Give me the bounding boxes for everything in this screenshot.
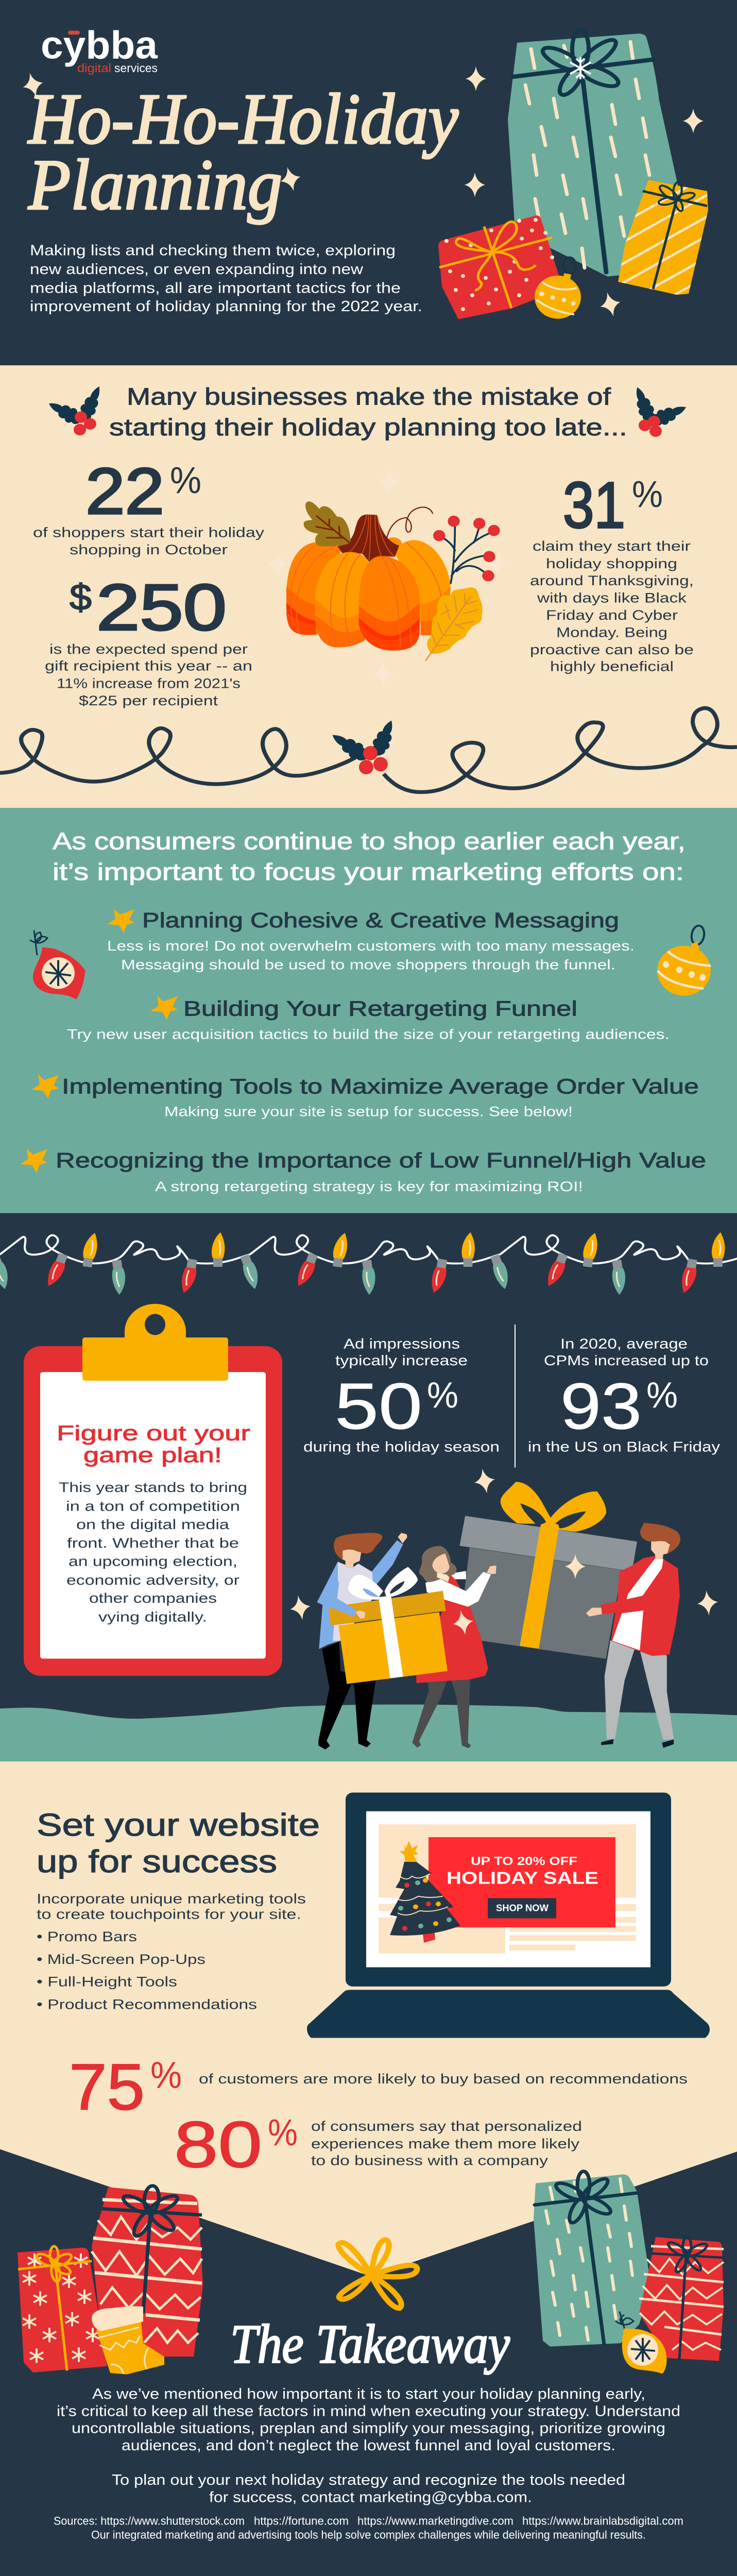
icon: holly right (630, 385, 690, 437)
stat: 22%: of shoppers start their holiday (33, 525, 264, 540)
takeaway paragraph: audiences, and don’t neglect the lowest funnel and loyal customers. (122, 2437, 615, 2454)
panel: clipboard game plan: Figure out your (57, 1422, 250, 1445)
heading: too late: Many businesses make the mistake of (127, 383, 611, 410)
sources footer (54, 2514, 683, 2541)
panel: clipboard game plan: other companies (89, 1590, 217, 1606)
title (27, 79, 459, 225)
logo: cybba digital services: services (114, 62, 158, 75)
heading: shop earlier (53, 828, 685, 886)
ground (0, 1705, 737, 1761)
stat: 31%: 31 (563, 468, 625, 541)
intro text: Making lists and checking them twice, exploring (30, 243, 396, 259)
stat: 93% CPMs: % (646, 1375, 678, 1415)
stat: 31%: holiday shopping (546, 556, 677, 571)
title: Ho-Ho-Holiday (27, 79, 459, 159)
tactic 1: messaging: Less is more! Do not overwhelm customers with too many messages. (107, 938, 635, 954)
intro text: improvement of holiday planning for the 2022 year. (30, 298, 422, 315)
stat: 50% ad impressions: during the holiday season (303, 1439, 500, 1455)
icon: pumpkin with leaves and berries (286, 501, 500, 660)
tactic 3: average order value (31, 1074, 699, 1119)
intro text (30, 243, 422, 315)
takeaway paragraph: To plan out your next holiday strategy and recognize the tools needed (112, 2472, 625, 2488)
icon: red snowflake gift (18, 2246, 107, 2372)
intro text: new audiences, or even expanding into new (30, 261, 363, 278)
sources footer: https://www.brainlabsdigital.com (522, 2514, 683, 2527)
string lights (0, 1232, 737, 1295)
divider (515, 1325, 516, 1467)
faint sparkles around pumpkin (268, 469, 508, 686)
takeaway paragraph: for success, contact marketing@cybba.com. (209, 2489, 532, 2505)
stat: 50% ad impressions: 50 (335, 1369, 422, 1443)
stat: 80%: experiences make them more likely (311, 2136, 579, 2151)
stat: 80%: to do business with a company (311, 2153, 548, 2168)
woman (412, 1546, 496, 1748)
heading: set your website (37, 1807, 320, 1879)
icon: red zigzag tall gift (92, 2185, 203, 2357)
sources footer: Our integrated marketing and advertising tools help solve complex challenges while delivering meaningful results. (91, 2528, 646, 2541)
stat: 22%: % (170, 459, 201, 501)
icon: laptop with holiday sale popup (307, 1792, 710, 2038)
stat: 80%: of consumers say that personalized (311, 2119, 582, 2134)
stat: $250: gift recipient this year -- an (45, 658, 252, 673)
stat: $250: 250 (96, 571, 227, 644)
left person (317, 1533, 407, 1750)
big gray gift (459, 1482, 637, 1659)
sources footer: https://fortune.com (254, 2514, 349, 2527)
takeaway paragraph: uncontrollable situations, preplan and simplify your messaging, prioritize growing (72, 2420, 665, 2436)
illustration sparkles (288, 1467, 719, 1637)
stat: 22%: 22 (85, 454, 164, 528)
icon: holly left (45, 383, 106, 435)
stat: 31%: % (632, 473, 663, 515)
panel: clipboard game plan: front. Whether that be (67, 1535, 239, 1551)
website tools list: to create touchpoints for your site. (37, 1906, 301, 1922)
stat: $250 (45, 571, 252, 708)
icon: tall teal gift (508, 30, 678, 277)
stat: 50% ad impressions (303, 1336, 500, 1455)
heading: the takeaway: The Takeaway (230, 2314, 510, 2375)
logo: cybba digital services: digital (77, 62, 111, 75)
stat: 31%: Monday. Being (556, 624, 667, 640)
stat: $250: is the expected spend per (49, 641, 248, 657)
tactic 2: retargeting funnel: Try new user acquisition tactics to build the size of your retargeting audiences. (67, 1026, 670, 1042)
icon: yellow ornament right (615, 2312, 667, 2374)
panel: clipboard game plan: vying digitally. (98, 1609, 207, 1624)
curly line divider right (384, 708, 737, 792)
panel: clipboard game plan: an upcoming election, (68, 1553, 237, 1569)
stat: 31%: with days like Black (537, 590, 687, 605)
tactic 4: low funnel (20, 1149, 706, 1194)
icon: red polka dot gift (438, 215, 563, 319)
website tools list (37, 1891, 306, 2012)
sale popup: UP TO 20% OFF (471, 1855, 577, 1868)
stat: 31% (530, 468, 694, 674)
website tools list: • Full-Height Tools (37, 1974, 177, 1990)
takeaway paragraph: As we’ve mentioned how important it is to start your holiday planning early, (92, 2386, 645, 2402)
panel: clipboard game plan: game plan! (83, 1444, 222, 1467)
stat: 31%: claim they start their (533, 538, 691, 554)
tactic 1: messaging: Planning Cohesive & Creative Messaging (142, 909, 619, 933)
tactic 2: retargeting funnel: Building Your Retargeting Funnel (183, 997, 577, 1021)
icon: red gift right (639, 2237, 724, 2361)
illustration: people with gifts (317, 1482, 680, 1750)
title: Planning (28, 145, 282, 225)
stat: 50% ad impressions: Ad impressions (344, 1336, 460, 1352)
logo: cybba digital services: cybba (41, 23, 158, 67)
icon: yellow bow (338, 2240, 417, 2308)
stat: 31%: proactive can also be (530, 642, 694, 657)
tactic 3: average order value: Making sure your site is setup for success. See below! (164, 1104, 573, 1119)
icon: stocking (92, 2306, 164, 2375)
panel: clipboard game plan: economic adversity, or (66, 1572, 239, 1588)
stat: 75%: of customers are more likely to buy based on recommendations (199, 2071, 688, 2087)
stat: 22%: shopping in October (70, 542, 228, 557)
panel: clipboard game plan: This year stands to bring (59, 1480, 247, 1495)
stat: 75%: 75 (69, 2050, 145, 2123)
stat: 22% (33, 454, 264, 557)
hero sparkles (20, 66, 704, 319)
intro text: media platforms, all are important tactics for the (30, 280, 401, 296)
heading: set your website: Set your website (37, 1807, 320, 1843)
website tools list: • Promo Bars (37, 1929, 137, 1944)
icon: teal gift right (534, 2171, 651, 2347)
tactic 2: retargeting funnel (67, 996, 670, 1042)
icon: yellow bauble (535, 257, 581, 319)
heading: shop earlier: As consumers continue to shop earlier each year, (53, 828, 685, 855)
stat: 31%: Friday and Cyber (546, 607, 678, 623)
panel: clipboard game plan: in a ton of competition (66, 1498, 240, 1514)
tactic 1: messaging (107, 909, 635, 972)
stat: $250: 11% increase from 2021's (57, 675, 241, 691)
stat: 80% (174, 2108, 582, 2181)
stat: $250: $ (70, 577, 92, 618)
stat: $250: $225 per recipient (79, 693, 218, 708)
sale popup: SHOP NOW (496, 1903, 549, 1913)
sources footer: https://www.marketingdive.com (357, 2514, 513, 2527)
takeaway paragraph (57, 2386, 680, 2505)
tactic 1: messaging: Messaging should be used to move shoppers through the funnel. (121, 957, 615, 972)
sources footer: Sources: https://www.shutterstock.com (54, 2514, 245, 2527)
stat: 93% CPMs: in the US on Black Friday (528, 1439, 721, 1455)
stat: 80%: 80 (174, 2108, 262, 2181)
takeaway paragraph: it’s critical to keep all these factors in mind when executing your strategy. Understand (57, 2403, 680, 2419)
right person (586, 1523, 680, 1748)
stat: 75% (69, 2050, 688, 2123)
tactic 4: low funnel: Recognizing the Importance of Low Funnel/High Value (56, 1149, 706, 1173)
heading: too late: starting their holiday planning too late... (109, 414, 627, 441)
stat: 50% ad impressions: % (427, 1375, 458, 1415)
stat: 80%: % (268, 2112, 298, 2154)
icon: yellow ornament (657, 925, 711, 996)
stat: 31%: around Thanksgiving, (530, 573, 694, 588)
icon: red ornament (30, 930, 85, 999)
panel: clipboard game plan (24, 1304, 282, 1676)
heading: shop earlier: it’s important to focus your marketing efforts on: (53, 859, 684, 886)
icon: holly on divider (327, 718, 400, 774)
stat: 93% CPMs (528, 1336, 721, 1455)
stat: 31%: highly beneficial (550, 659, 674, 674)
stat: 50% ad impressions: typically increase (335, 1353, 468, 1369)
heading: too late (109, 383, 627, 441)
sale popup (429, 1837, 615, 1927)
website tools list: • Product Recommendations (37, 1996, 257, 2012)
yellow gift held (317, 1567, 448, 1684)
tactic 3: average order value: Implementing Tools to Maximize Average Order Value (62, 1075, 699, 1098)
heading: set your website: up for success (37, 1843, 277, 1879)
stat: 75%: % (150, 2054, 182, 2096)
panel: clipboard game plan: on the digital media (76, 1517, 230, 1532)
stat: 93% CPMs: In 2020, average (560, 1336, 688, 1352)
stat: 93% CPMs: CPMs increased up to (544, 1353, 709, 1369)
christmas tree (390, 1841, 460, 1943)
website tools list: • Mid-Screen Pop-Ups (37, 1952, 205, 1967)
icon: striped yellow gift (618, 180, 708, 295)
curly line divider left (0, 708, 737, 792)
stat: 93% CPMs: 93 (560, 1369, 642, 1443)
tactic 4: low funnel: A strong retargeting strategy is key for maximizing ROI! (155, 1179, 583, 1194)
sale popup: HOLIDAY SALE (447, 1869, 598, 1888)
website tools list: Incorporate unique marketing tools (37, 1891, 306, 1906)
